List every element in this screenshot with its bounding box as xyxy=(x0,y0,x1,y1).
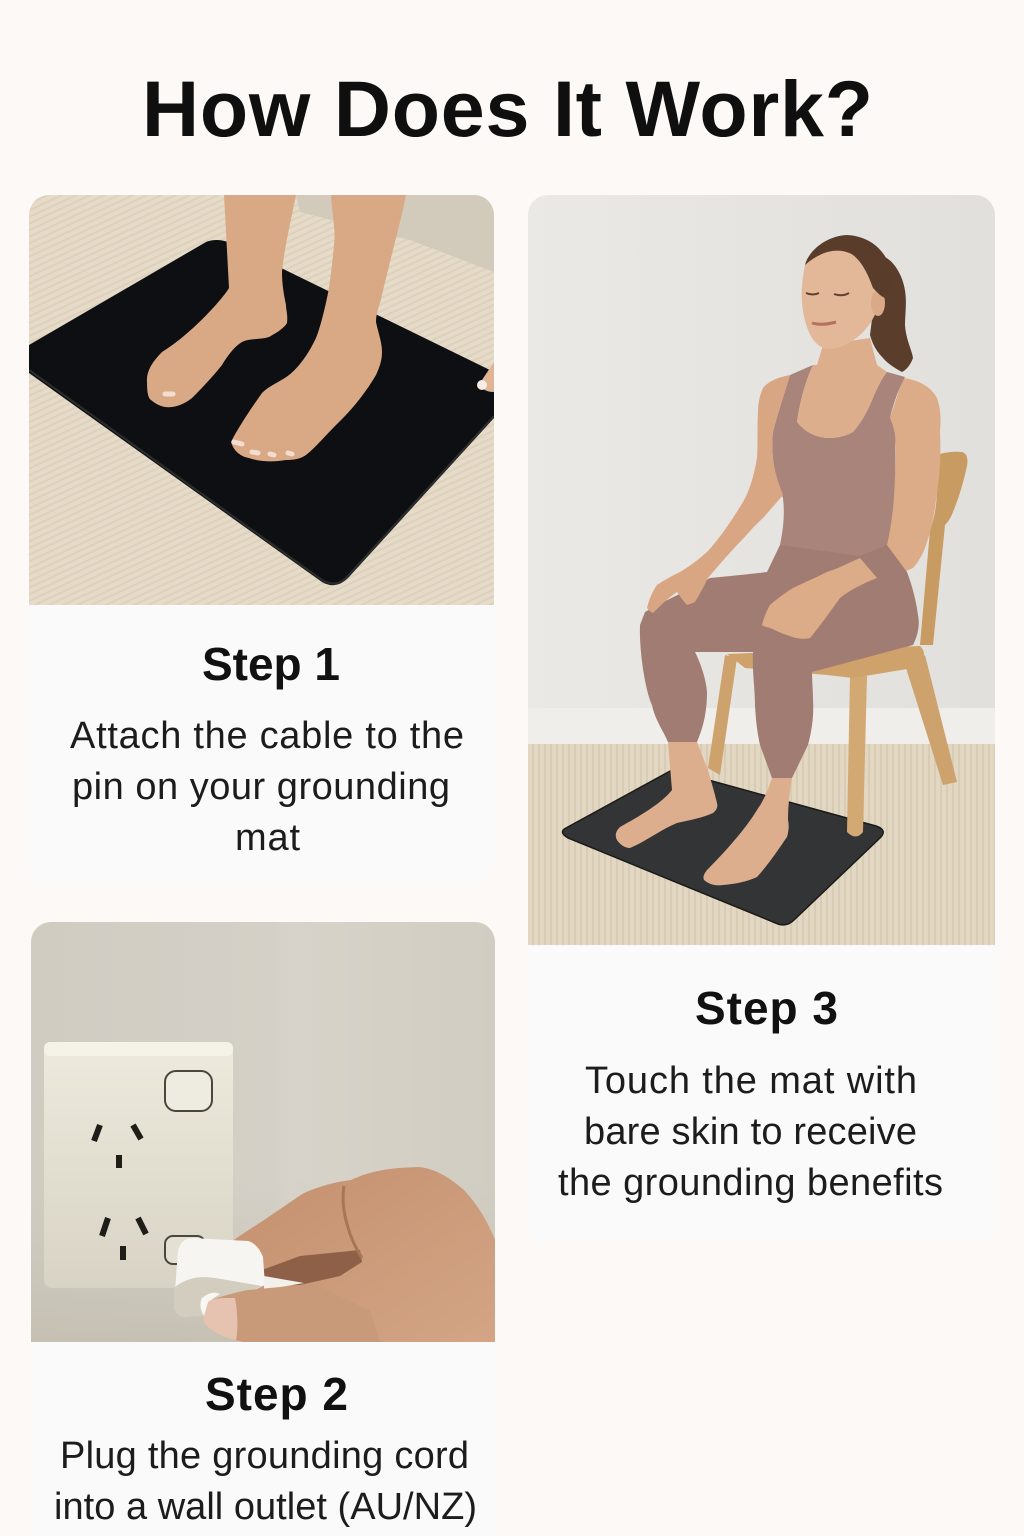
rear leg xyxy=(906,655,957,785)
step 3 card background xyxy=(528,940,995,1245)
step 1 description xyxy=(70,715,464,859)
wall outlet plate xyxy=(44,1042,233,1288)
step 1 heading: Step 1 xyxy=(202,638,340,690)
toe nails xyxy=(165,394,292,455)
step 2 description xyxy=(54,1435,477,1528)
chair xyxy=(708,452,967,836)
grounding mat xyxy=(562,770,883,925)
hand xyxy=(234,1167,495,1342)
face details xyxy=(806,293,849,295)
left foot xyxy=(616,742,717,848)
back arm hand over thigh xyxy=(762,558,877,639)
fingertip at mat edge xyxy=(482,362,494,392)
step 2 description: Plug the grounding cord xyxy=(60,1435,469,1477)
leggings thighs and calves xyxy=(640,545,919,778)
top socket pins xyxy=(94,1125,141,1168)
bottom switch xyxy=(165,1236,205,1264)
right foot xyxy=(703,778,792,885)
tank top xyxy=(772,365,905,556)
step 3 description: bare skin to receive xyxy=(584,1111,917,1153)
step 2 description: into a wall outlet (AU/NZ) xyxy=(54,1486,477,1528)
step 1 description: pin on your grounding xyxy=(72,766,450,808)
step 3 heading: Step 3 xyxy=(695,982,838,1034)
floor tile xyxy=(296,195,494,272)
title: How Does It Work? xyxy=(142,64,873,153)
left leg and foot xyxy=(147,195,296,407)
step 3 description: the grounding benefits xyxy=(558,1162,943,1204)
step 3 photo: woman seated on chair xyxy=(528,195,995,945)
panel: step 3 xyxy=(528,195,995,1245)
step 1 card background xyxy=(29,600,494,885)
plug xyxy=(174,1238,304,1317)
step 2 photo: plug in wall outlet xyxy=(31,922,495,1342)
shadow between finger and thumb xyxy=(262,1250,362,1286)
step 2 heading: Step 2 xyxy=(205,1368,348,1420)
panel: step 2 xyxy=(31,922,495,1536)
seat xyxy=(727,646,924,678)
neck and chest xyxy=(797,338,887,438)
ear xyxy=(871,290,885,316)
bottom socket pins xyxy=(102,1218,146,1260)
step 3 description: Touch the mat with xyxy=(585,1060,917,1102)
step 2 card background xyxy=(31,1340,495,1536)
head xyxy=(802,250,876,349)
step 1 description: Attach the cable to the xyxy=(70,715,464,757)
skirting board xyxy=(528,708,995,746)
thumb xyxy=(203,1286,284,1342)
front arm xyxy=(647,375,790,613)
top switch xyxy=(165,1071,212,1111)
step 1 description: mat xyxy=(235,817,300,859)
back arm xyxy=(887,378,940,571)
grounding mat xyxy=(29,240,494,585)
step 1 photo: feet on mat xyxy=(29,195,494,605)
left leg xyxy=(708,655,737,775)
right leg and foot xyxy=(231,195,406,461)
step 3 description xyxy=(558,1060,943,1204)
front leg xyxy=(847,676,867,836)
panel: step 1 xyxy=(29,195,494,885)
ponytail xyxy=(870,255,913,372)
hair xyxy=(805,235,890,298)
back rest xyxy=(920,452,967,645)
